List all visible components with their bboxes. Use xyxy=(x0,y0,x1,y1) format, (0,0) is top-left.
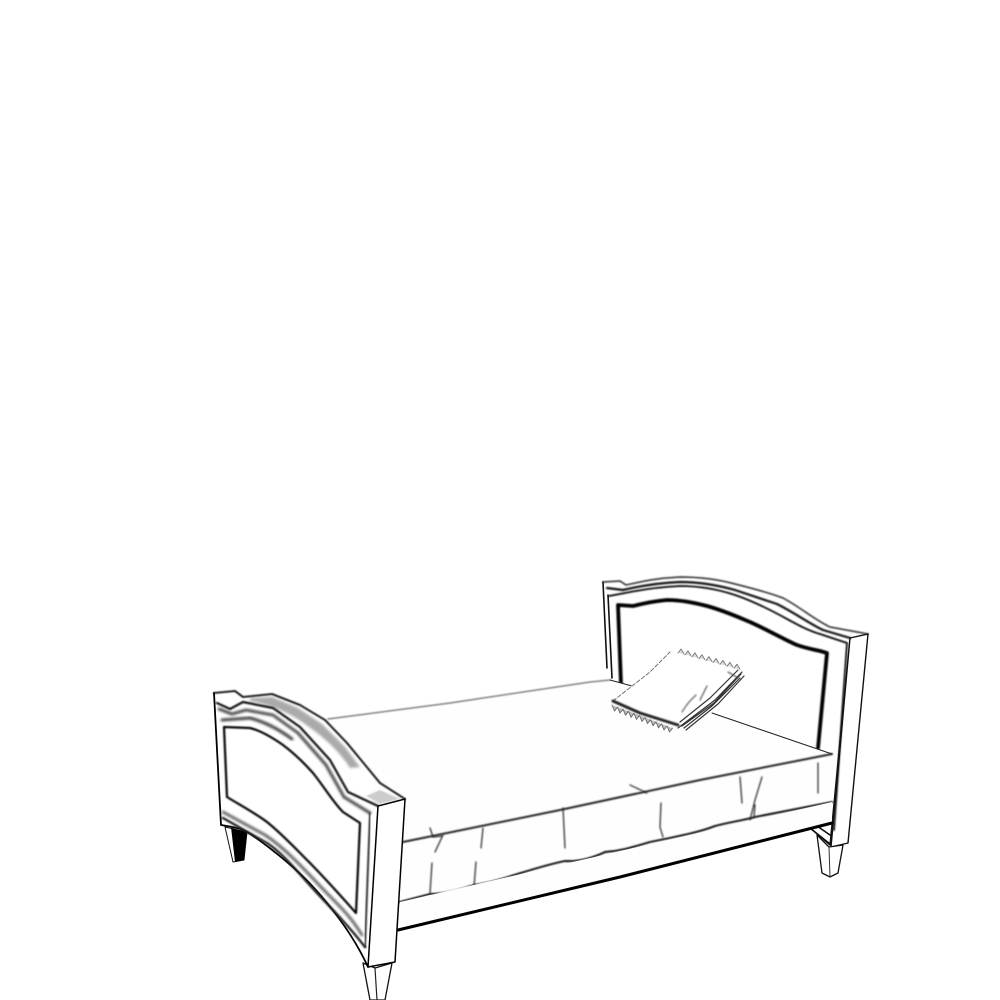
mattress back edge xyxy=(328,680,610,719)
pillow folded side xyxy=(678,670,744,730)
headboard inner panel xyxy=(618,600,827,748)
bed frame rail xyxy=(398,802,832,930)
headboard right post xyxy=(810,634,868,847)
footboard front face post xyxy=(368,799,405,967)
headboard xyxy=(603,577,868,847)
back right leg xyxy=(810,826,843,877)
footboard top surface shading xyxy=(250,697,360,768)
footboard xyxy=(214,691,405,967)
pillow xyxy=(612,649,744,732)
mattress wrinkles xyxy=(430,763,818,893)
back left leg xyxy=(225,827,247,862)
footboard inner panel xyxy=(224,727,360,913)
footboard lower molding xyxy=(223,818,365,947)
mattress front top edge xyxy=(403,754,832,842)
mattress lower edge xyxy=(400,802,832,902)
pillow serrated top edge xyxy=(678,649,740,669)
mattress side edge xyxy=(610,680,832,754)
front leg xyxy=(363,963,392,1000)
mattress xyxy=(325,680,832,902)
pillow serrated bottom edge xyxy=(612,705,672,732)
pillow wrinkles xyxy=(682,672,738,712)
